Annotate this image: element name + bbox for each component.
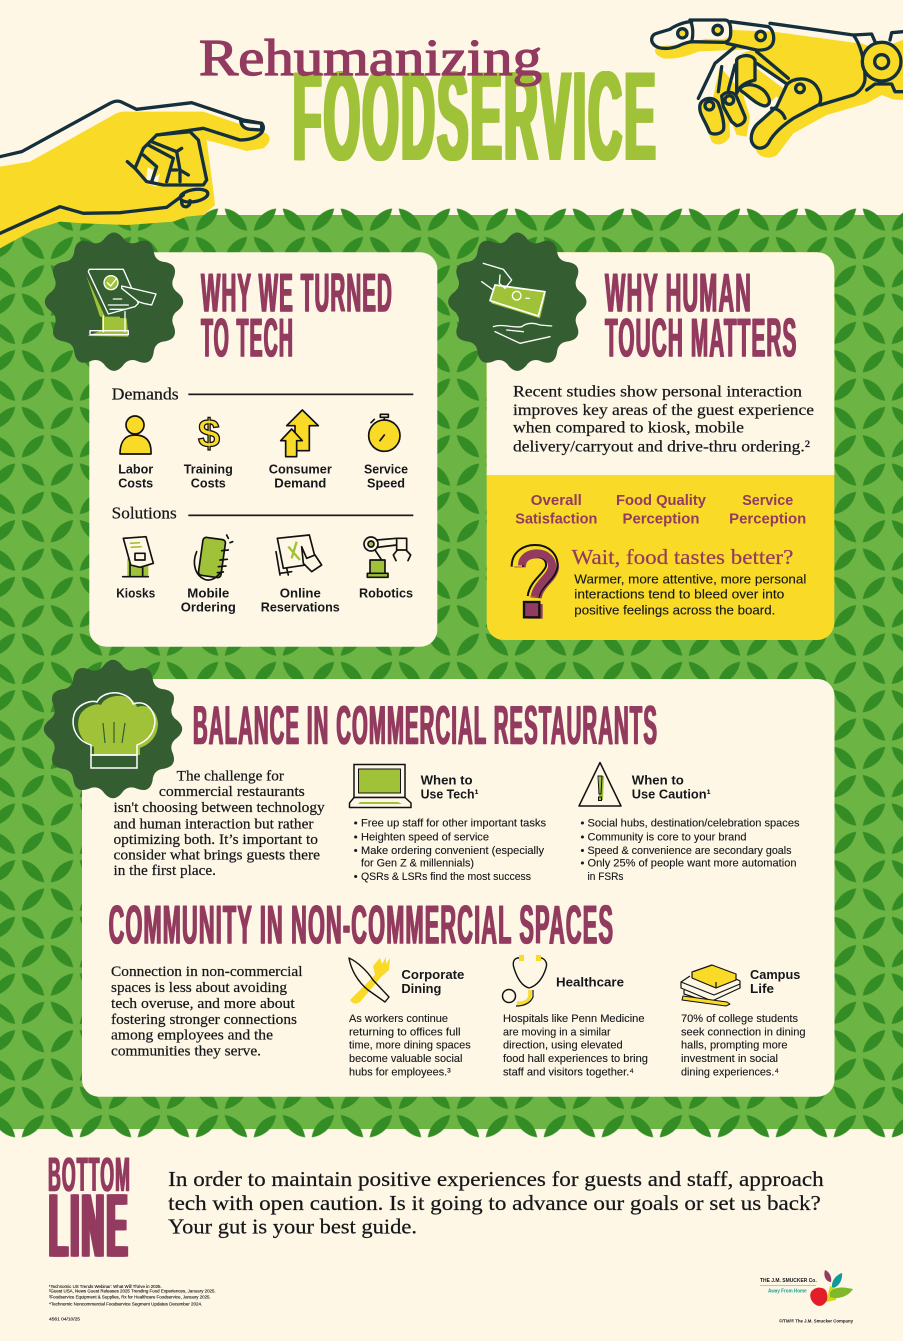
labels: demands: Speed <box>367 475 405 490</box>
labels: demands: Costs <box>191 475 226 490</box>
heading: healthcare: Healthcare <box>556 975 624 990</box>
heading: when to use caution: When to <box>632 772 684 787</box>
callout: wait food tastes better <box>572 545 806 617</box>
section: solutions <box>112 504 413 615</box>
heading: when to use caution: Use Caution¹ <box>632 786 711 801</box>
text: campus life: investment in social <box>681 1053 778 1065</box>
icon: consumer demand arrows <box>281 410 318 457</box>
labels: demands: Service <box>364 461 408 476</box>
heading: campus life: Life <box>750 981 774 996</box>
heading: when to use tech: When to <box>421 772 473 787</box>
section: solutions: Solutions <box>112 504 177 523</box>
heading: corporate dining: Dining <box>401 981 441 996</box>
heading: bottom line <box>48 1149 131 1277</box>
list: when to use caution: Social hubs, destination/celebration spaces <box>588 818 800 830</box>
list: when to use caution: Only 25% of people want more automation <box>588 858 796 870</box>
heading: why we turned to tech <box>201 262 393 369</box>
text: studies intro: improves key areas of the guest experience <box>513 402 814 419</box>
text: commercial challenge: optimizing both. It’s important to <box>114 832 318 848</box>
text: campus life: 70% of college students <box>681 1013 798 1025</box>
heading: campus life: Campus <box>750 967 800 982</box>
icon: fork and knife <box>349 957 390 1004</box>
icon: online reservations <box>276 535 322 575</box>
text: commercial challenge: and human interaction but rather <box>114 816 314 832</box>
list: when to use tech: for Gen Z & millennials) <box>361 858 474 870</box>
text: commercial challenge <box>114 769 325 879</box>
heading: why human touch matters <box>605 262 798 369</box>
text: healthcare: staff and visitors together.⁴ <box>503 1066 634 1078</box>
badge: chef hat icon <box>44 660 182 798</box>
text: corporate dining: hubs for employees.³ <box>349 1066 451 1078</box>
text: studies intro: when compared to kiosk, mobile <box>513 420 744 437</box>
labels: demands: Consumer <box>269 461 332 476</box>
text: campus life: halls, prompting more <box>681 1040 788 1052</box>
text: non-commercial connection: communities they serve. <box>111 1043 261 1059</box>
text: commercial challenge: consider what brings guests there <box>114 847 320 863</box>
icon: stethoscope <box>502 955 547 1006</box>
icon: kiosk <box>123 537 153 577</box>
copyright: ©/TM/® The J.M. Smucker Company <box>779 1317 853 1323</box>
footnotes: ¹Technomic US Trends Webinar: What Will Thrive in 2025. <box>49 1284 162 1289</box>
text: corporate dining <box>349 1013 471 1078</box>
logo: J.M. Smucker Co. Away From Home: Away From Home <box>768 1289 807 1295</box>
heading: corporate dining: Corporate <box>401 967 464 982</box>
callout: wait food tastes better: Warmer, more attentive, more personal <box>574 571 806 586</box>
heading: campus life <box>750 967 800 996</box>
list: when to use tech: • <box>354 871 358 883</box>
labels: experience areas: Food Quality <box>616 493 706 509</box>
text: studies intro: delivery/carryout and drive-thru ordering.² <box>513 439 810 456</box>
labels: solutions: Kiosks <box>116 586 155 601</box>
footnotes: ²Guest USA, News Guest Releases 2025 Trending Food Experiences, January 2025. <box>49 1289 216 1294</box>
list: when to use tech: QSRs & LSRs find the most success <box>361 871 531 883</box>
illustration: human hand pointing <box>0 101 270 248</box>
labels: demands: Labor <box>118 461 153 476</box>
footnotes: ⁴Technomic Noncommercial Foodservice Segment Updates December 2024. <box>49 1301 202 1306</box>
panel: why human touch matters <box>487 252 834 640</box>
text: healthcare: Hospitals like Penn Medicine <box>503 1013 644 1025</box>
text: bottom line: In order to maintain positive experiences for guests and staff, approach <box>168 1167 824 1191</box>
icon: laptop <box>350 764 411 808</box>
text: campus life: dining experiences.⁴ <box>681 1066 779 1078</box>
text: healthcare: food hall experiences to bring <box>503 1053 648 1065</box>
list: when to use tech: Free up staff for other important tasks <box>361 818 546 830</box>
labels: experience areas: Overall <box>531 493 582 509</box>
list: when to use tech: • <box>354 818 358 830</box>
labels: experience areas <box>515 493 806 527</box>
labels: demands <box>118 461 408 490</box>
labels: demands: Demand <box>274 475 326 490</box>
text: bottom line <box>168 1167 824 1238</box>
labels: solutions <box>116 586 413 615</box>
footnotes <box>49 1284 216 1321</box>
list: when to use caution: • <box>580 845 584 857</box>
text: campus life <box>681 1013 806 1078</box>
title <box>199 30 658 187</box>
text: LINE <box>49 1177 130 1277</box>
icon: labor costs person <box>120 416 151 454</box>
text: studies intro <box>513 384 814 456</box>
panel: why we turned to tech <box>89 252 437 647</box>
callout: wait food tastes better: positive feelings across the board. <box>574 602 775 617</box>
list: when to use tech <box>354 818 546 883</box>
text: non-commercial connection: tech overuse, and more about <box>111 996 296 1012</box>
logo: J.M. Smucker Co. Away From Home: THE J.M. SMUCKER Co. <box>760 1278 817 1284</box>
list: when to use tech: • <box>354 832 358 844</box>
list: when to use caution: • <box>580 858 584 870</box>
text: commercial challenge: in the first place. <box>114 863 216 879</box>
callout: wait food tastes better: Wait, food tastes better? <box>572 545 793 569</box>
text: non-commercial connection: Connection in non-commercial <box>111 964 302 980</box>
heading: why we turned to tech: TO TECH <box>201 307 294 369</box>
labels: experience areas: Perception <box>729 511 806 527</box>
list: when to use tech: Heighten speed of service <box>361 832 489 844</box>
text: non-commercial connection: spaces is less about avoiding <box>111 980 287 996</box>
icon: training costs dollar: $ <box>198 412 220 456</box>
list: when to use tech: • <box>354 845 358 857</box>
text: healthcare: direction, using elevated <box>503 1040 623 1052</box>
text: commercial challenge: commercial restaurants <box>159 784 305 800</box>
text: WHY WE TURNED <box>201 262 393 324</box>
labels: solutions: Ordering <box>181 600 236 615</box>
list: when to use caution: • <box>580 818 584 830</box>
text: commercial challenge: The challenge for <box>177 769 284 785</box>
labels: solutions: Robotics <box>359 586 413 601</box>
badge: money handoff icon <box>448 232 587 371</box>
panel: balance and community <box>82 679 834 1097</box>
green patterned background band <box>0 208 903 1137</box>
heading: when to use tech <box>421 772 479 801</box>
heading: when to use tech: Use Tech¹ <box>421 786 479 801</box>
text: BOTTOM <box>48 1149 131 1202</box>
text: non-commercial connection <box>111 964 302 1059</box>
labels: experience areas: Service <box>742 493 793 509</box>
footnotes: ³Foodservice Equipment & Supplies, Rx for Healthcare Foodservice, January 2025. <box>49 1295 211 1300</box>
icon: robotics <box>364 537 411 577</box>
labels: solutions: Mobile <box>187 586 229 601</box>
text: non-commercial connection: among employees and the <box>111 1028 273 1044</box>
text: healthcare: are moving in a similar <box>503 1026 611 1038</box>
footnotes: 4561 04/10/25 <box>49 1316 80 1321</box>
text: commercial challenge: isn't choosing between technology <box>114 800 325 816</box>
labels: demands: Training <box>184 461 233 476</box>
text: bottom line: Your gut is your best guide. <box>168 1214 417 1238</box>
badge: kiosk touch icon <box>45 232 183 371</box>
logo: J.M. Smucker Co. Away From Home <box>760 1270 853 1306</box>
text: corporate dining: time, more dining spaces <box>349 1040 471 1052</box>
list: when to use caution: in FSRs <box>588 871 624 883</box>
heading: when to use caution <box>632 772 711 801</box>
icon: mobile ordering <box>194 535 233 580</box>
text: bottom line: tech with open caution. Is it going to advance our goals or set us back? <box>168 1191 821 1215</box>
labels: experience areas: Perception <box>622 511 700 527</box>
icon: service speed stopwatch <box>369 414 400 451</box>
list: when to use caution: Speed & convenience are secondary goals <box>588 845 792 857</box>
text: corporate dining: As workers continue <box>349 1013 448 1025</box>
labels: experience areas: Satisfaction <box>515 511 597 527</box>
list: when to use tech: Make ordering convenient (especially <box>361 845 544 857</box>
text: healthcare <box>503 1013 648 1078</box>
section: demands <box>112 384 413 490</box>
text: corporate dining: become valuable social <box>349 1053 462 1065</box>
icon: question mark <box>517 551 553 619</box>
icon: books and pencil <box>681 965 740 1006</box>
labels: solutions: Reservations <box>261 600 340 615</box>
labels: demands: Costs <box>118 475 153 490</box>
list: when to use caution <box>580 818 800 883</box>
labels: solutions: Online <box>280 586 321 601</box>
icon: caution triangle <box>579 762 621 806</box>
illustration: robot hand <box>652 20 903 158</box>
text: campus life: seek connection in dining <box>681 1026 806 1038</box>
callout: wait food tastes better: interactions tend to bleed over into <box>574 586 784 601</box>
list: when to use caution: Community is core to your brand <box>588 832 746 844</box>
text: non-commercial connection: fostering stronger connections <box>111 1012 297 1028</box>
heading: corporate dining <box>401 967 464 996</box>
text: corporate dining: returning to offices full <box>349 1026 460 1038</box>
title: Rehumanizing <box>199 30 542 87</box>
list: when to use caution: • <box>580 832 584 844</box>
section: demands: Demands <box>112 384 179 403</box>
text: studies intro: Recent studies show personal interaction <box>513 384 802 401</box>
